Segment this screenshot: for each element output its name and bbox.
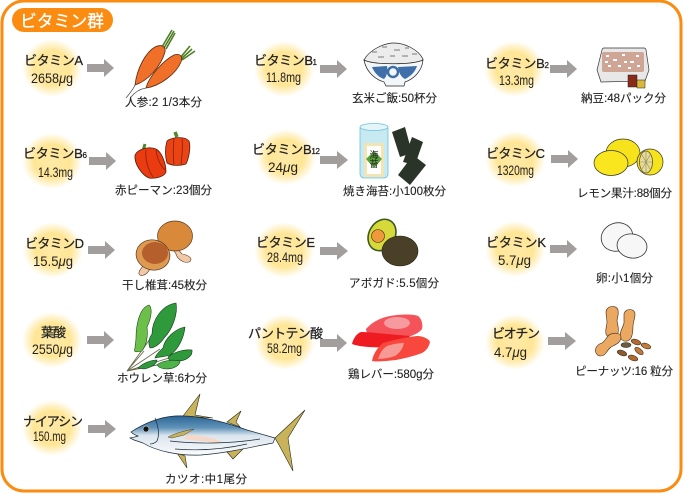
- caption: カツオ:中1尾分: [165, 473, 248, 486]
- caption: アボガド:5.5個分: [349, 277, 440, 290]
- icon: spinach: [127, 303, 192, 371]
- arrow: [551, 150, 578, 168]
- panel: vitamin C: [485, 131, 672, 200]
- arrow: [320, 151, 348, 169]
- arrow: [88, 420, 116, 438]
- caption: 赤ピーマン:23個分: [115, 184, 212, 197]
- caption: レモン果汁:88個分: [577, 187, 672, 200]
- panel: vitamin B1: [254, 41, 438, 105]
- glow: [254, 222, 314, 278]
- icon: bonito fish: [130, 394, 305, 471]
- icon: rice bowl: [364, 43, 423, 86]
- panel: vitamin D: [23, 221, 208, 292]
- arrow: [89, 152, 116, 170]
- arrow: [320, 60, 347, 78]
- panel: vitamin K: [485, 218, 654, 285]
- glow: [484, 41, 544, 97]
- caption: 玄米ご飯:50杯分: [352, 91, 438, 105]
- arrow: [87, 331, 114, 349]
- icon: carrots: [126, 30, 195, 98]
- glow: [256, 129, 316, 185]
- caption: ピーナッツ:16 粒分: [575, 364, 674, 378]
- panel: vitamin B6: [22, 132, 212, 197]
- panel: pantothenic acid: [248, 314, 434, 381]
- arrow: [88, 241, 115, 259]
- glow: [485, 314, 545, 370]
- name: ビタミンB1: [254, 53, 318, 68]
- glow: [23, 222, 83, 278]
- name: ビタミンB6: [23, 146, 88, 161]
- amount: 5.7μg: [498, 252, 531, 268]
- glow: [22, 133, 82, 189]
- caption: 卵:小1個分: [596, 271, 654, 285]
- amount: 4.7μg: [494, 344, 527, 360]
- icon: peanuts: [595, 306, 652, 362]
- panel: folic acid: [22, 303, 208, 385]
- icon: shiitake mushrooms: [133, 221, 192, 276]
- title text: ビタミン群: [20, 12, 104, 31]
- panel: vitamin A: [22, 30, 202, 109]
- amount: 2658μg: [31, 70, 73, 86]
- glow: [485, 221, 545, 277]
- icon: eggs: [597, 218, 649, 260]
- caption: 焼き海苔:小100枚分: [343, 184, 446, 198]
- caption: 干し椎茸:45枚分: [122, 278, 208, 292]
- icon: nori jar and sheets: 苔: [370, 158, 379, 169]
- name: パントテン酸: [248, 326, 323, 341]
- caption: ホウレン草:6わ分: [117, 372, 208, 385]
- icon: natto pack: [597, 48, 649, 88]
- amount: 2550μg: [32, 341, 73, 357]
- icon: chicken liver: [352, 314, 430, 361]
- amount: 28.4mg: [267, 249, 303, 265]
- panel: vitamin B2: [484, 41, 666, 105]
- amount: 150.mg: [33, 428, 66, 444]
- amount: 13.3mg: [499, 72, 534, 88]
- arrow: [320, 334, 347, 352]
- amount: 14.3mg: [38, 164, 73, 180]
- arrow: [550, 240, 577, 258]
- name: ビオチン: [492, 326, 540, 341]
- panel: niacin: [22, 394, 305, 486]
- icon: nori jar and sheets: [360, 124, 426, 185]
- arrow: [550, 60, 577, 78]
- name: ビタミンB2: [485, 56, 550, 71]
- title pill: [12, 8, 113, 32]
- glow: [254, 41, 314, 97]
- caption: 納豆:48パック分: [581, 91, 666, 105]
- amount: 15.5μg: [33, 253, 73, 269]
- icon: red peppers: [135, 132, 190, 178]
- caption: 鶏レバー:580g分: [348, 367, 434, 381]
- arrow: [320, 242, 348, 260]
- glow: [22, 400, 82, 456]
- glow: [485, 131, 545, 187]
- glow: [22, 39, 82, 97]
- name: ビタミンA: [24, 53, 83, 68]
- icon: lemons: [594, 139, 663, 176]
- arrow: [87, 59, 114, 77]
- amount: 11.8mg: [266, 69, 301, 85]
- name: ビタミンD: [25, 236, 84, 251]
- name: ビタミンK: [486, 235, 546, 250]
- glow: [22, 312, 82, 368]
- arrow: [548, 332, 576, 350]
- amount: 1320mg: [497, 162, 534, 178]
- amount: 58.2mg: [267, 340, 302, 356]
- jar label text: 海: [370, 149, 379, 160]
- panel: vitamin B12: [252, 124, 446, 198]
- panel: biotin: [485, 306, 674, 378]
- panel: vitamin E: [254, 214, 440, 290]
- caption: 人参:2 1/3本分: [125, 95, 202, 109]
- icon: avocados: [362, 214, 418, 266]
- name: ナイアシン: [23, 414, 83, 429]
- name: 葉酸: [41, 325, 66, 340]
- name: ビタミンE: [256, 235, 315, 250]
- name: ビタミンC: [486, 146, 545, 161]
- name: ビタミンB12: [252, 142, 321, 157]
- amount: 24μg: [268, 159, 298, 175]
- glow: [255, 314, 315, 370]
